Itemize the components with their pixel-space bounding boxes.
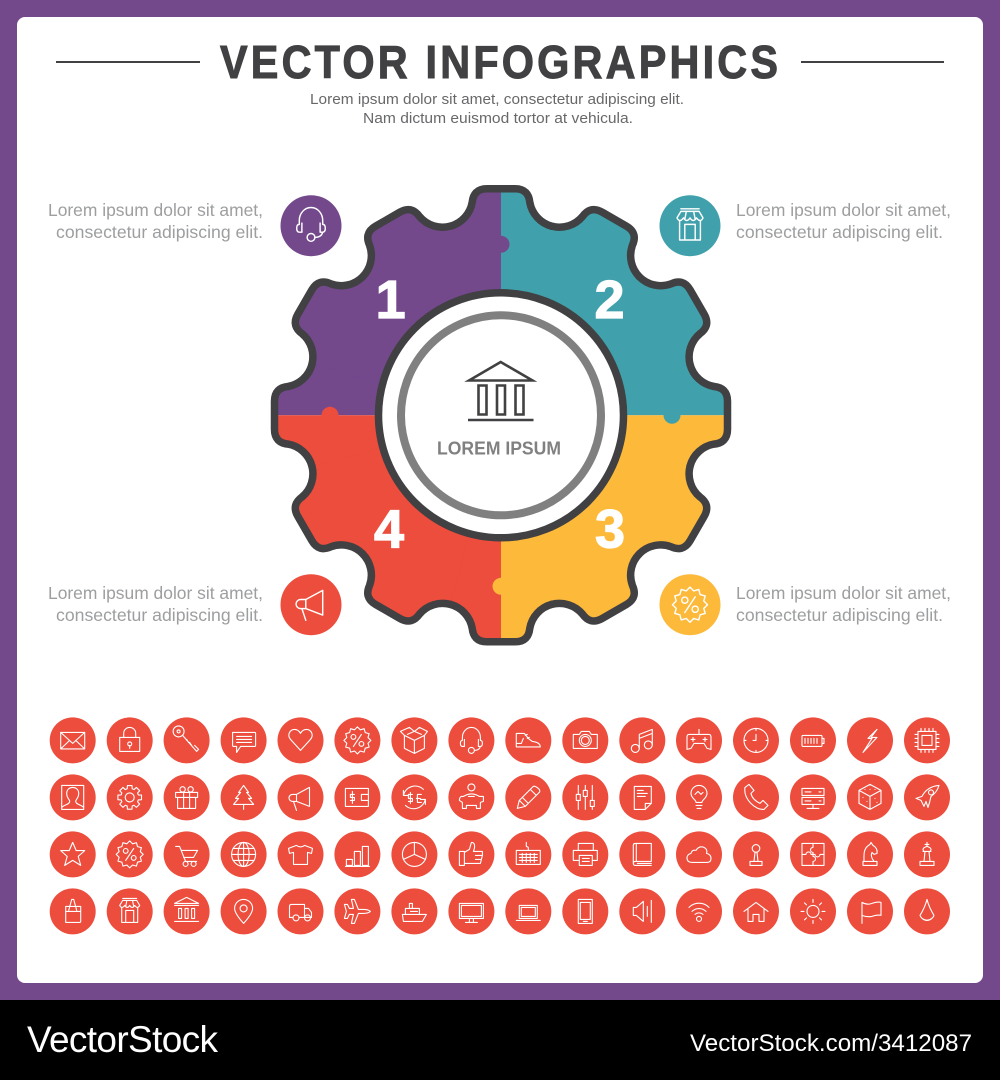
icon: camera	[562, 717, 608, 763]
text block: top left: consectetur adipiscing elit.	[56, 222, 263, 242]
subtitle: Nam dictum euismod tortor at vehicula.	[363, 110, 633, 127]
text block: top left	[48, 200, 263, 242]
icon: speaker	[619, 888, 665, 934]
icon: shopping cart	[164, 831, 210, 877]
icon: storefront	[107, 888, 153, 934]
text block: top right	[736, 200, 951, 242]
footer url: VectorStock.com/3412087	[690, 1030, 972, 1057]
number 3: 3	[595, 500, 625, 560]
gear segment 3: yellow	[501, 415, 724, 638]
hub inner ring	[401, 315, 601, 515]
icon: yellow percent badge	[660, 574, 720, 635]
text block: bottom right: Lorem ipsum dolor sit amet,	[736, 583, 951, 603]
gear segment 2: teal	[501, 192, 724, 416]
icon: keyboard	[505, 831, 551, 877]
footer bar	[0, 1000, 1000, 1080]
icon: flag	[847, 888, 893, 934]
icon: home	[733, 888, 779, 934]
number 4: 4	[374, 500, 404, 560]
icon: printer	[562, 831, 608, 877]
icon grid	[50, 717, 950, 934]
hub label: LOREM IPSUM	[437, 438, 561, 458]
icon: cloud	[676, 831, 722, 877]
icon: location pin	[221, 888, 267, 934]
icon: chip	[904, 717, 950, 763]
icon: headset	[448, 717, 494, 763]
text block: top right: consectetur adipiscing elit.	[736, 222, 943, 242]
icon: laptop	[505, 888, 551, 934]
footer brand: VectorStock	[27, 1019, 218, 1060]
icon: shopping bag	[50, 888, 96, 934]
icon: speech bubble	[221, 717, 267, 763]
icon: megaphone	[278, 774, 324, 820]
icon: music notes	[619, 717, 665, 763]
puzzle tab: purple into teal	[492, 236, 510, 253]
icon: lightning bolt	[847, 717, 893, 763]
icon: chess bishop	[904, 831, 950, 877]
icon: ship	[391, 888, 437, 934]
icon: bar chart	[334, 831, 380, 877]
icon: light bulb	[676, 774, 722, 820]
icon: airplane	[334, 888, 380, 934]
icon: monitor	[448, 888, 494, 934]
icon: sun	[790, 888, 836, 934]
icon: battery	[790, 717, 836, 763]
icon: piggy bank	[448, 774, 494, 820]
icon: bank in hub	[468, 362, 534, 420]
icon: heart	[278, 717, 324, 763]
text block: bottom left	[48, 583, 263, 625]
subtitle: Lorem ipsum dolor sit amet, consectetur adipiscing elit.	[310, 91, 684, 108]
icon: rocket	[904, 774, 950, 820]
text block: bottom right: consectetur adipiscing elit.	[736, 605, 943, 625]
icon: thumbs up	[448, 831, 494, 877]
icon: pie chart	[391, 831, 437, 877]
icon: clock	[733, 717, 779, 763]
icon: server	[790, 774, 836, 820]
icon: gear	[107, 774, 153, 820]
icon: gift	[164, 774, 210, 820]
icon: dice	[847, 774, 893, 820]
puzzle tab: yellow into red	[492, 578, 510, 595]
hub circle	[378, 293, 624, 538]
icon: bank	[164, 888, 210, 934]
icon: teal store badge	[660, 195, 720, 256]
icon: chess knight	[847, 831, 893, 877]
text block: bottom right	[736, 583, 951, 625]
text block: bottom left: Lorem ipsum dolor sit amet,	[48, 583, 263, 603]
icon: lock	[107, 717, 153, 763]
number 1: 1	[376, 270, 406, 330]
title: VECTOR INFOGRAPHICS	[220, 37, 778, 89]
icon: envelope	[50, 717, 96, 763]
icon: jigsaw puzzle	[790, 831, 836, 877]
text block: bottom left: consectetur adipiscing elit.	[56, 605, 263, 625]
icon: water drop	[904, 888, 950, 934]
icon: pencil	[505, 774, 551, 820]
icon: user portrait	[50, 774, 96, 820]
icon: book	[619, 831, 665, 877]
text block: top left: Lorem ipsum dolor sit amet,	[48, 200, 263, 220]
icon: star	[50, 831, 96, 877]
icon: wallet	[334, 774, 380, 820]
puzzle tab: red into purple	[322, 407, 338, 424]
icon: pine tree	[221, 774, 267, 820]
text block: top right: Lorem ipsum dolor sit amet,	[736, 200, 951, 220]
icon: key	[164, 717, 210, 763]
icon: currency exchange	[391, 774, 437, 820]
icon: open box	[391, 717, 437, 763]
icon: wifi	[676, 888, 722, 934]
icon: phone handset	[733, 774, 779, 820]
subtitle	[310, 91, 684, 127]
icon: delivery truck	[278, 888, 324, 934]
icon: game controller	[676, 717, 722, 763]
icon: red megaphone badge	[280, 574, 342, 635]
gear segment 1: purple	[278, 192, 501, 416]
icon: tablet	[562, 888, 608, 934]
gear outline	[274, 189, 728, 642]
icon: percent badge	[107, 831, 153, 877]
puzzle tab: teal into yellow	[664, 407, 680, 424]
icon: pawn	[733, 831, 779, 877]
icon: purple headset badge	[280, 195, 342, 256]
icon: sliders	[562, 774, 608, 820]
icon: percent badge	[334, 717, 380, 763]
icon: t-shirt	[278, 831, 324, 877]
gear segment 4: red	[278, 415, 501, 638]
icon: globe	[221, 831, 267, 877]
gear diagram	[274, 189, 728, 642]
icon: shoe	[505, 717, 551, 763]
number 2: 2	[594, 270, 625, 330]
icon: document	[619, 774, 665, 820]
